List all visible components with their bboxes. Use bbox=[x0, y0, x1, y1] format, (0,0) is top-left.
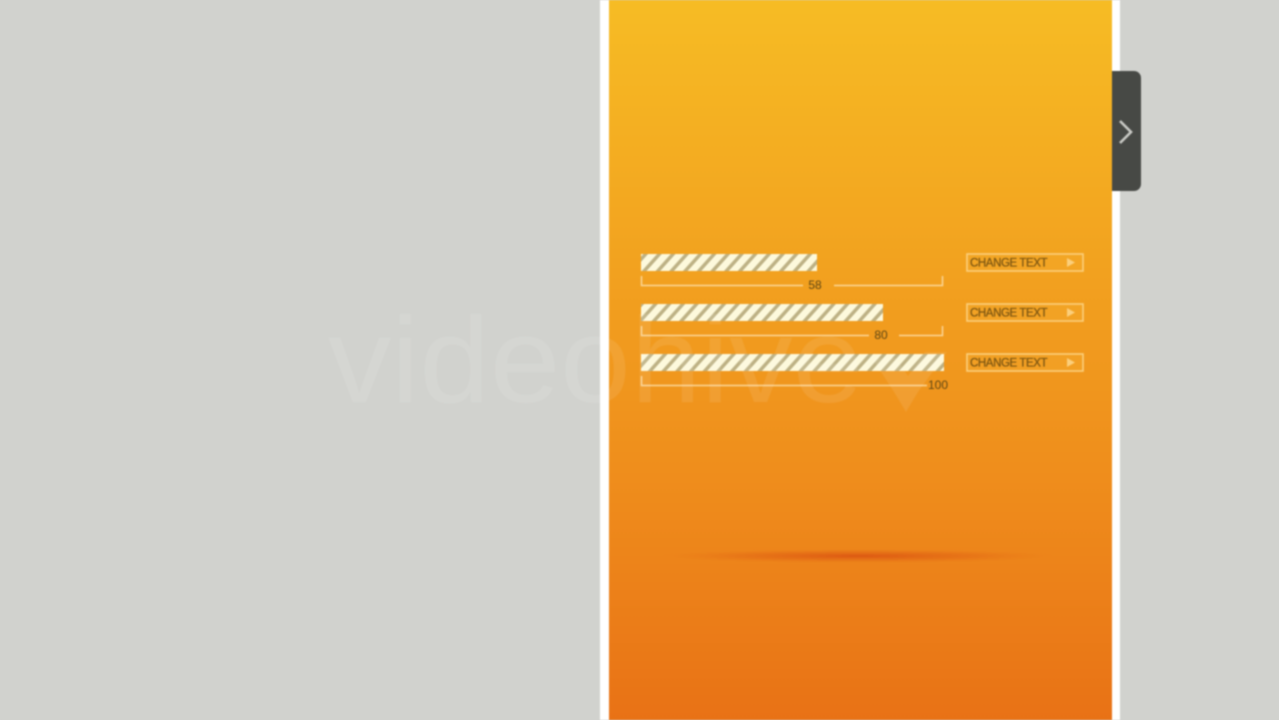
icon: chevron arrow bbox=[1120, 121, 1131, 143]
label button 1: CHANGE TEXT bbox=[970, 258, 1048, 270]
bar 100: 100 bbox=[928, 378, 948, 392]
watermark: videohive bbox=[328, 292, 863, 428]
label button 3 bbox=[967, 354, 1083, 371]
panel: orange card with white border bbox=[600, 0, 1120, 720]
floor shadow bbox=[663, 549, 1053, 563]
bar 58: 58 bbox=[808, 278, 822, 292]
tab: dark side tab with arrow bbox=[1112, 71, 1141, 191]
bar 100 bbox=[641, 354, 948, 392]
label button 2 bbox=[967, 304, 1083, 321]
bar 58 bbox=[641, 254, 942, 292]
bar 80 bbox=[641, 304, 942, 342]
label button 2: CHANGE TEXT bbox=[970, 308, 1048, 320]
bar chart: striped progress bars bbox=[641, 254, 948, 392]
bar 80: 80 bbox=[874, 328, 888, 342]
label button 1 bbox=[967, 254, 1083, 271]
label button 3: CHANGE TEXT bbox=[970, 358, 1048, 370]
